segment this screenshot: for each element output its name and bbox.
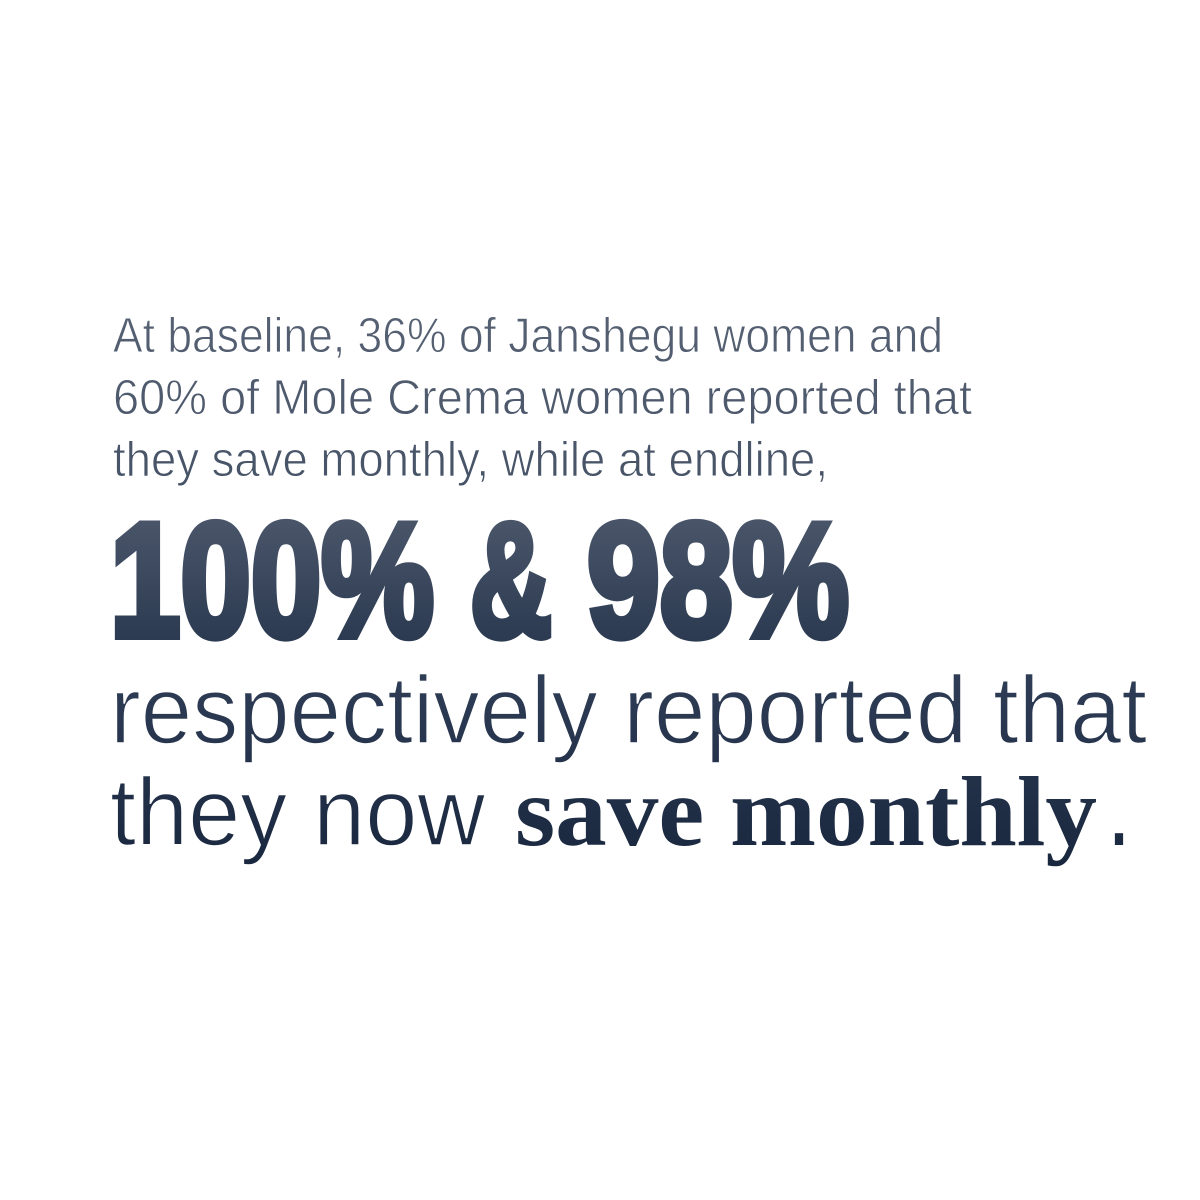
statistic: 100%: 100% xyxy=(110,490,434,671)
emphasis: save monthly: save monthly xyxy=(515,756,1097,867)
closing period: . xyxy=(1107,746,1131,869)
closing text: they now: they now xyxy=(110,759,486,866)
intro text block xyxy=(113,309,972,487)
intro line 1: At baseline, 36% of Janshegu women and xyxy=(113,309,943,363)
headline statistic xyxy=(110,490,849,671)
closing line 2 xyxy=(110,746,1131,869)
intro line 2: 60% of Mole Crema women reported that xyxy=(113,371,972,425)
intro line 3: they save monthly, while at endline, xyxy=(113,433,828,487)
closing statement xyxy=(110,657,1147,869)
closing line 1: respectively reported that xyxy=(110,657,1147,764)
statistic: 98%: 98% xyxy=(587,490,849,671)
ampersand: & xyxy=(470,490,552,671)
